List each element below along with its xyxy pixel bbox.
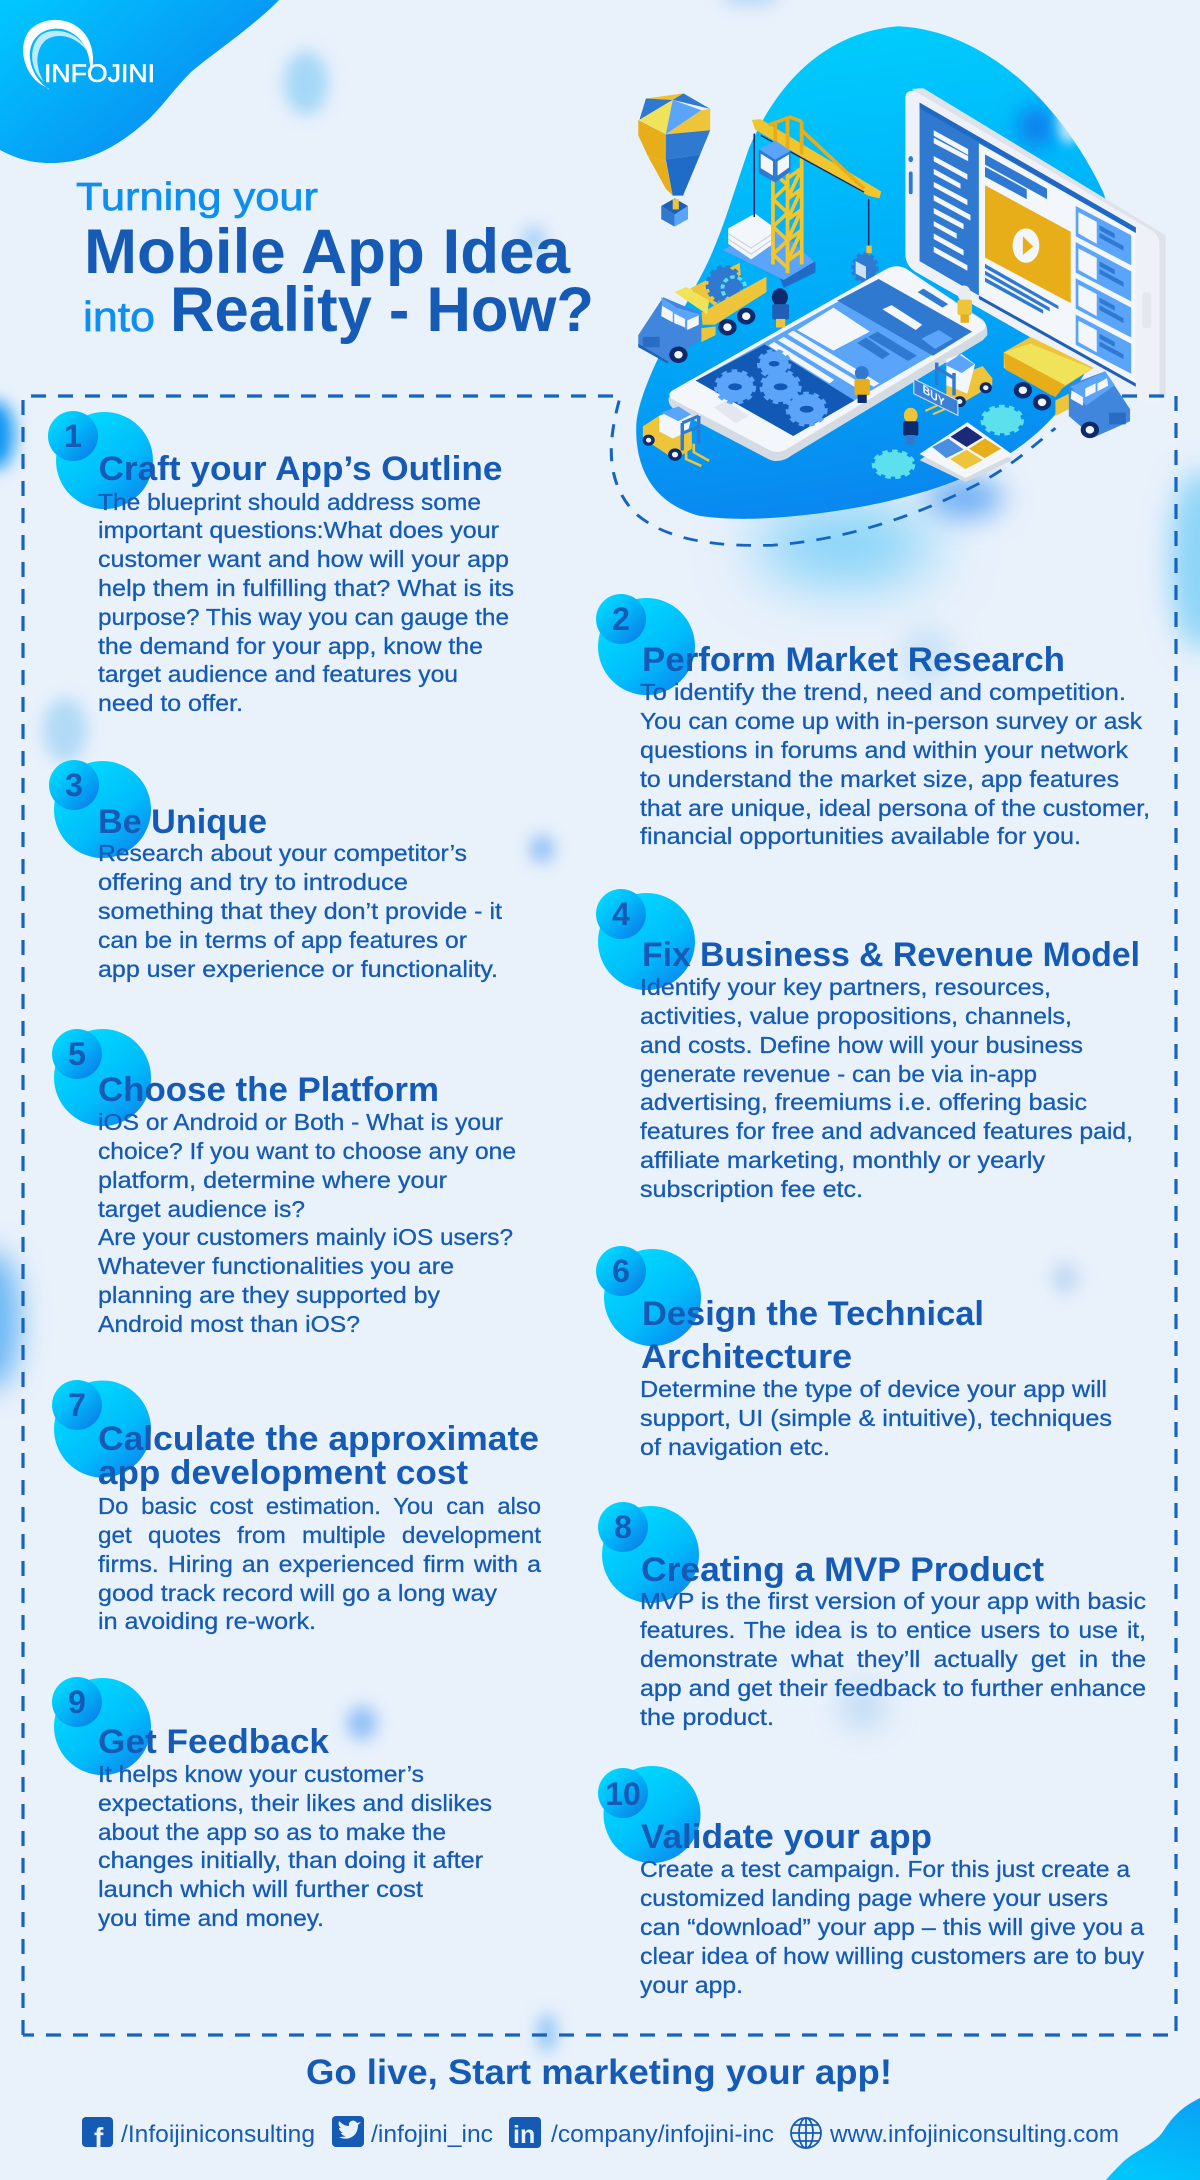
heading 2: Perform Market Research <box>642 641 1065 679</box>
body 3: Research about your competitor’s <box>98 840 467 866</box>
title: into <box>83 293 155 340</box>
title: Reality - How? <box>170 275 594 345</box>
body 4: generate revenue - can be via in-app <box>640 1061 1037 1087</box>
crane <box>722 116 881 288</box>
body 8: app and get their feedback to further enhance <box>640 1675 1146 1701</box>
social link: linkedin <box>509 2117 774 2149</box>
body 10: clear idea of how willing customers are to buy <box>640 1943 1145 1969</box>
logo: Infojini <box>23 20 155 90</box>
social link: facebook: f <box>94 2122 104 2153</box>
body 1: customer want and how will your app <box>98 546 509 572</box>
body 10: your app. <box>640 1972 743 1998</box>
heading 4: Fix Business & Revenue Model <box>642 936 1140 974</box>
heading 9: Get Feedback <box>98 1723 329 1761</box>
body 10: can “download” your app – this will give you a <box>640 1914 1144 1940</box>
badge 1 <box>48 411 98 461</box>
logo: Infojini: INFOJINI <box>44 60 155 88</box>
body 2 <box>640 679 1150 849</box>
hero blob <box>636 26 1115 519</box>
heading 7: app development cost <box>98 1454 468 1492</box>
body 2: To identify the trend, need and competition. <box>640 679 1126 705</box>
step 1: Craft your App's Outline <box>48 411 514 716</box>
body 1: target audience and features you <box>98 661 458 687</box>
heading 10: Validate your app <box>641 1818 932 1856</box>
body 4: subscription fee etc. <box>640 1176 863 1202</box>
heading 1: Craft your App’s Outline <box>98 450 503 488</box>
badge 9: 9 <box>68 1684 86 1720</box>
badge 2: 2 <box>612 601 630 637</box>
badge 7: 7 <box>68 1387 86 1423</box>
body 6: of navigation etc. <box>640 1434 830 1460</box>
tablet side cards <box>1076 206 1131 374</box>
step 3: Be Unique <box>49 760 503 982</box>
body 9: It helps know your customer’s <box>98 1761 424 1787</box>
body 9: launch which will further cost <box>98 1876 424 1902</box>
body 4 <box>640 974 1133 1202</box>
badge 8 <box>598 1502 648 1552</box>
dashed border <box>23 396 1176 2035</box>
social link: twitter: /infojini_inc <box>371 2121 493 2148</box>
body 4: affiliate marketing, monthly or yearly <box>640 1147 1046 1173</box>
body 3 <box>98 840 503 982</box>
phone <box>669 266 987 461</box>
forklift right with buy sign <box>914 354 992 415</box>
body 3: can be in terms of app features or <box>98 927 467 953</box>
step 4: Fix Business & Revenue Model <box>596 889 1140 1202</box>
hero illustration: app building site <box>611 26 1166 545</box>
body 4: and costs. Define how will your business <box>640 1032 1083 1058</box>
title: Mobile App Idea <box>84 217 571 287</box>
body 1: purpose? This way you can gauge the <box>98 604 509 630</box>
body 9: expectations, their likes and dislikes <box>98 1790 492 1816</box>
badge 8: 8 <box>614 1509 632 1545</box>
body 2: You can come up with in-person survey or ask <box>640 708 1143 734</box>
badge 3: 3 <box>65 767 83 803</box>
step 10: Validate your app <box>598 1766 1145 1998</box>
body 10: Create a test campaign. For this just create a <box>640 1856 1130 1882</box>
badge 2 <box>596 594 646 644</box>
body 7 <box>98 1493 542 1634</box>
body 6: support, UI (simple & intuitive), techniques <box>640 1405 1112 1431</box>
body 7: in avoiding re-work. <box>98 1608 316 1634</box>
badge 5 <box>52 1029 102 1079</box>
body 7: good track record will go a long way <box>98 1580 498 1606</box>
heading 6 <box>641 1295 984 1376</box>
body 4: advertising, freemiums i.e. offering basic <box>640 1089 1087 1115</box>
body 5: choice? If you want to choose any one <box>98 1138 516 1164</box>
body 6: Determine the type of device your app will <box>640 1376 1107 1402</box>
body 5: target audience is? <box>98 1196 305 1222</box>
badge 5: 5 <box>68 1036 86 1072</box>
body 2: questions in forums and within your network <box>640 737 1129 763</box>
body 5: Are your customers mainly iOS users? <box>98 1224 513 1250</box>
badge 10 <box>598 1768 648 1818</box>
body 2: to understand the market size, app features <box>640 766 1119 792</box>
body 8 <box>640 1588 1146 1730</box>
body 5: platform, determine where your <box>98 1167 447 1193</box>
badge 6: 6 <box>612 1253 630 1289</box>
heading 8: Creating a MVP Product <box>641 1551 1044 1589</box>
soft edge glow <box>1057 96 1080 144</box>
balloon <box>638 93 710 227</box>
truck right <box>1004 337 1130 438</box>
badge 3 <box>49 760 99 810</box>
body 5 <box>98 1109 516 1337</box>
top-left corner shape <box>0 0 279 163</box>
forklift right with buy sign: BUY <box>923 381 945 410</box>
social link: linkedin: in <box>513 2121 535 2149</box>
title <box>76 176 594 345</box>
body 2: financial opportunities available for you. <box>640 823 1081 849</box>
heading 7 <box>98 1420 539 1492</box>
body 7: Do basic cost estimation. You can also <box>98 1493 541 1519</box>
badge 7 <box>52 1380 102 1430</box>
body 10: customized landing page where your users <box>640 1885 1108 1911</box>
heading 3: Be Unique <box>98 803 267 841</box>
body 1: need to offer. <box>98 690 243 716</box>
step 6: Design the Technical Architecture <box>596 1246 1112 1460</box>
body 9: about the app so as to make the <box>98 1819 446 1845</box>
app tile <box>920 422 1013 482</box>
closing call to action: Go live, Start marketing your app! <box>306 2053 892 2092</box>
body 6 <box>640 1376 1112 1460</box>
social link: facebook: /Infoijiniconsulting <box>121 2121 315 2148</box>
body 1: important questions:What does your <box>98 517 499 543</box>
body 9: you time and money. <box>98 1905 324 1931</box>
step 5: Choose the Platform <box>52 1029 516 1337</box>
tablet <box>905 88 1166 402</box>
step 8: Creating a MVP Product <box>598 1502 1146 1730</box>
people <box>772 286 972 445</box>
step 9: Get Feedback <box>52 1677 492 1931</box>
body 8: MVP is the first version of your app with basic <box>640 1588 1146 1614</box>
social link: facebook <box>82 2117 315 2153</box>
body 3: offering and try to introduce <box>98 869 408 895</box>
step 2: Perform Market Research <box>596 594 1150 849</box>
body 1: the demand for your app, know the <box>98 633 483 659</box>
body 5: planning are they supported by <box>98 1282 441 1308</box>
badge 4: 4 <box>612 896 630 932</box>
body 7: get quotes from multiple development <box>98 1522 542 1548</box>
body 5: Android most than iOS? <box>98 1311 360 1337</box>
title: Turning your <box>76 176 318 219</box>
body 8: features. The idea is to entice users to use it, <box>640 1617 1146 1643</box>
body 2: that are unique, ideal persona of the customer, <box>640 795 1150 821</box>
body 4: features for free and advanced features paid, <box>640 1118 1133 1144</box>
body 10 <box>640 1856 1145 1998</box>
body 3: app user experience or functionality. <box>98 956 498 982</box>
dark spot on blob <box>1019 106 1053 147</box>
body 4: activities, value propositions, channels, <box>640 1003 1072 1029</box>
dashed curve <box>611 401 1055 545</box>
social link: twitter <box>332 2116 493 2148</box>
forklift left <box>642 406 709 466</box>
body 3: something that they don’t provide - it <box>98 898 503 924</box>
truck left <box>638 263 766 364</box>
body 5: iOS or Android or Both - What is your <box>98 1109 503 1135</box>
heading 5: Choose the Platform <box>98 1071 439 1109</box>
body 4: Identify your key partners, resources, <box>640 974 1051 1000</box>
badge 9 <box>52 1677 102 1727</box>
body 8: demonstrate what they’ll actually get in the <box>640 1646 1146 1672</box>
heading 6: Design the Technical <box>642 1295 984 1333</box>
heading 7: Calculate the approximate <box>98 1420 539 1458</box>
badge 4 <box>596 889 646 939</box>
badge 6 <box>596 1246 646 1296</box>
body 1 <box>98 489 514 716</box>
body 9 <box>98 1761 492 1931</box>
body 7: firms. Hiring an experienced firm with a <box>98 1551 541 1577</box>
body 1: The blueprint should address some <box>98 489 481 515</box>
social link: website: www.infojiniconsulting.com <box>829 2121 1119 2148</box>
body 9: changes initially, than doing it after <box>98 1847 483 1873</box>
body 8: the product. <box>640 1704 774 1730</box>
heading 6: Architecture <box>641 1338 852 1376</box>
body 5: Whatever functionalities you are <box>98 1253 454 1279</box>
cyan gears <box>874 407 1021 477</box>
body 1: help them in fulfilling that? What is its <box>98 575 514 601</box>
step 7: Calculate the approximate app development cost <box>52 1380 542 1634</box>
social link: linkedin: /company/infojini-inc <box>551 2121 774 2148</box>
badge 1: 1 <box>64 418 82 454</box>
bottom-right corner shape <box>1106 2098 1200 2180</box>
badge 10: 10 <box>605 1776 641 1812</box>
